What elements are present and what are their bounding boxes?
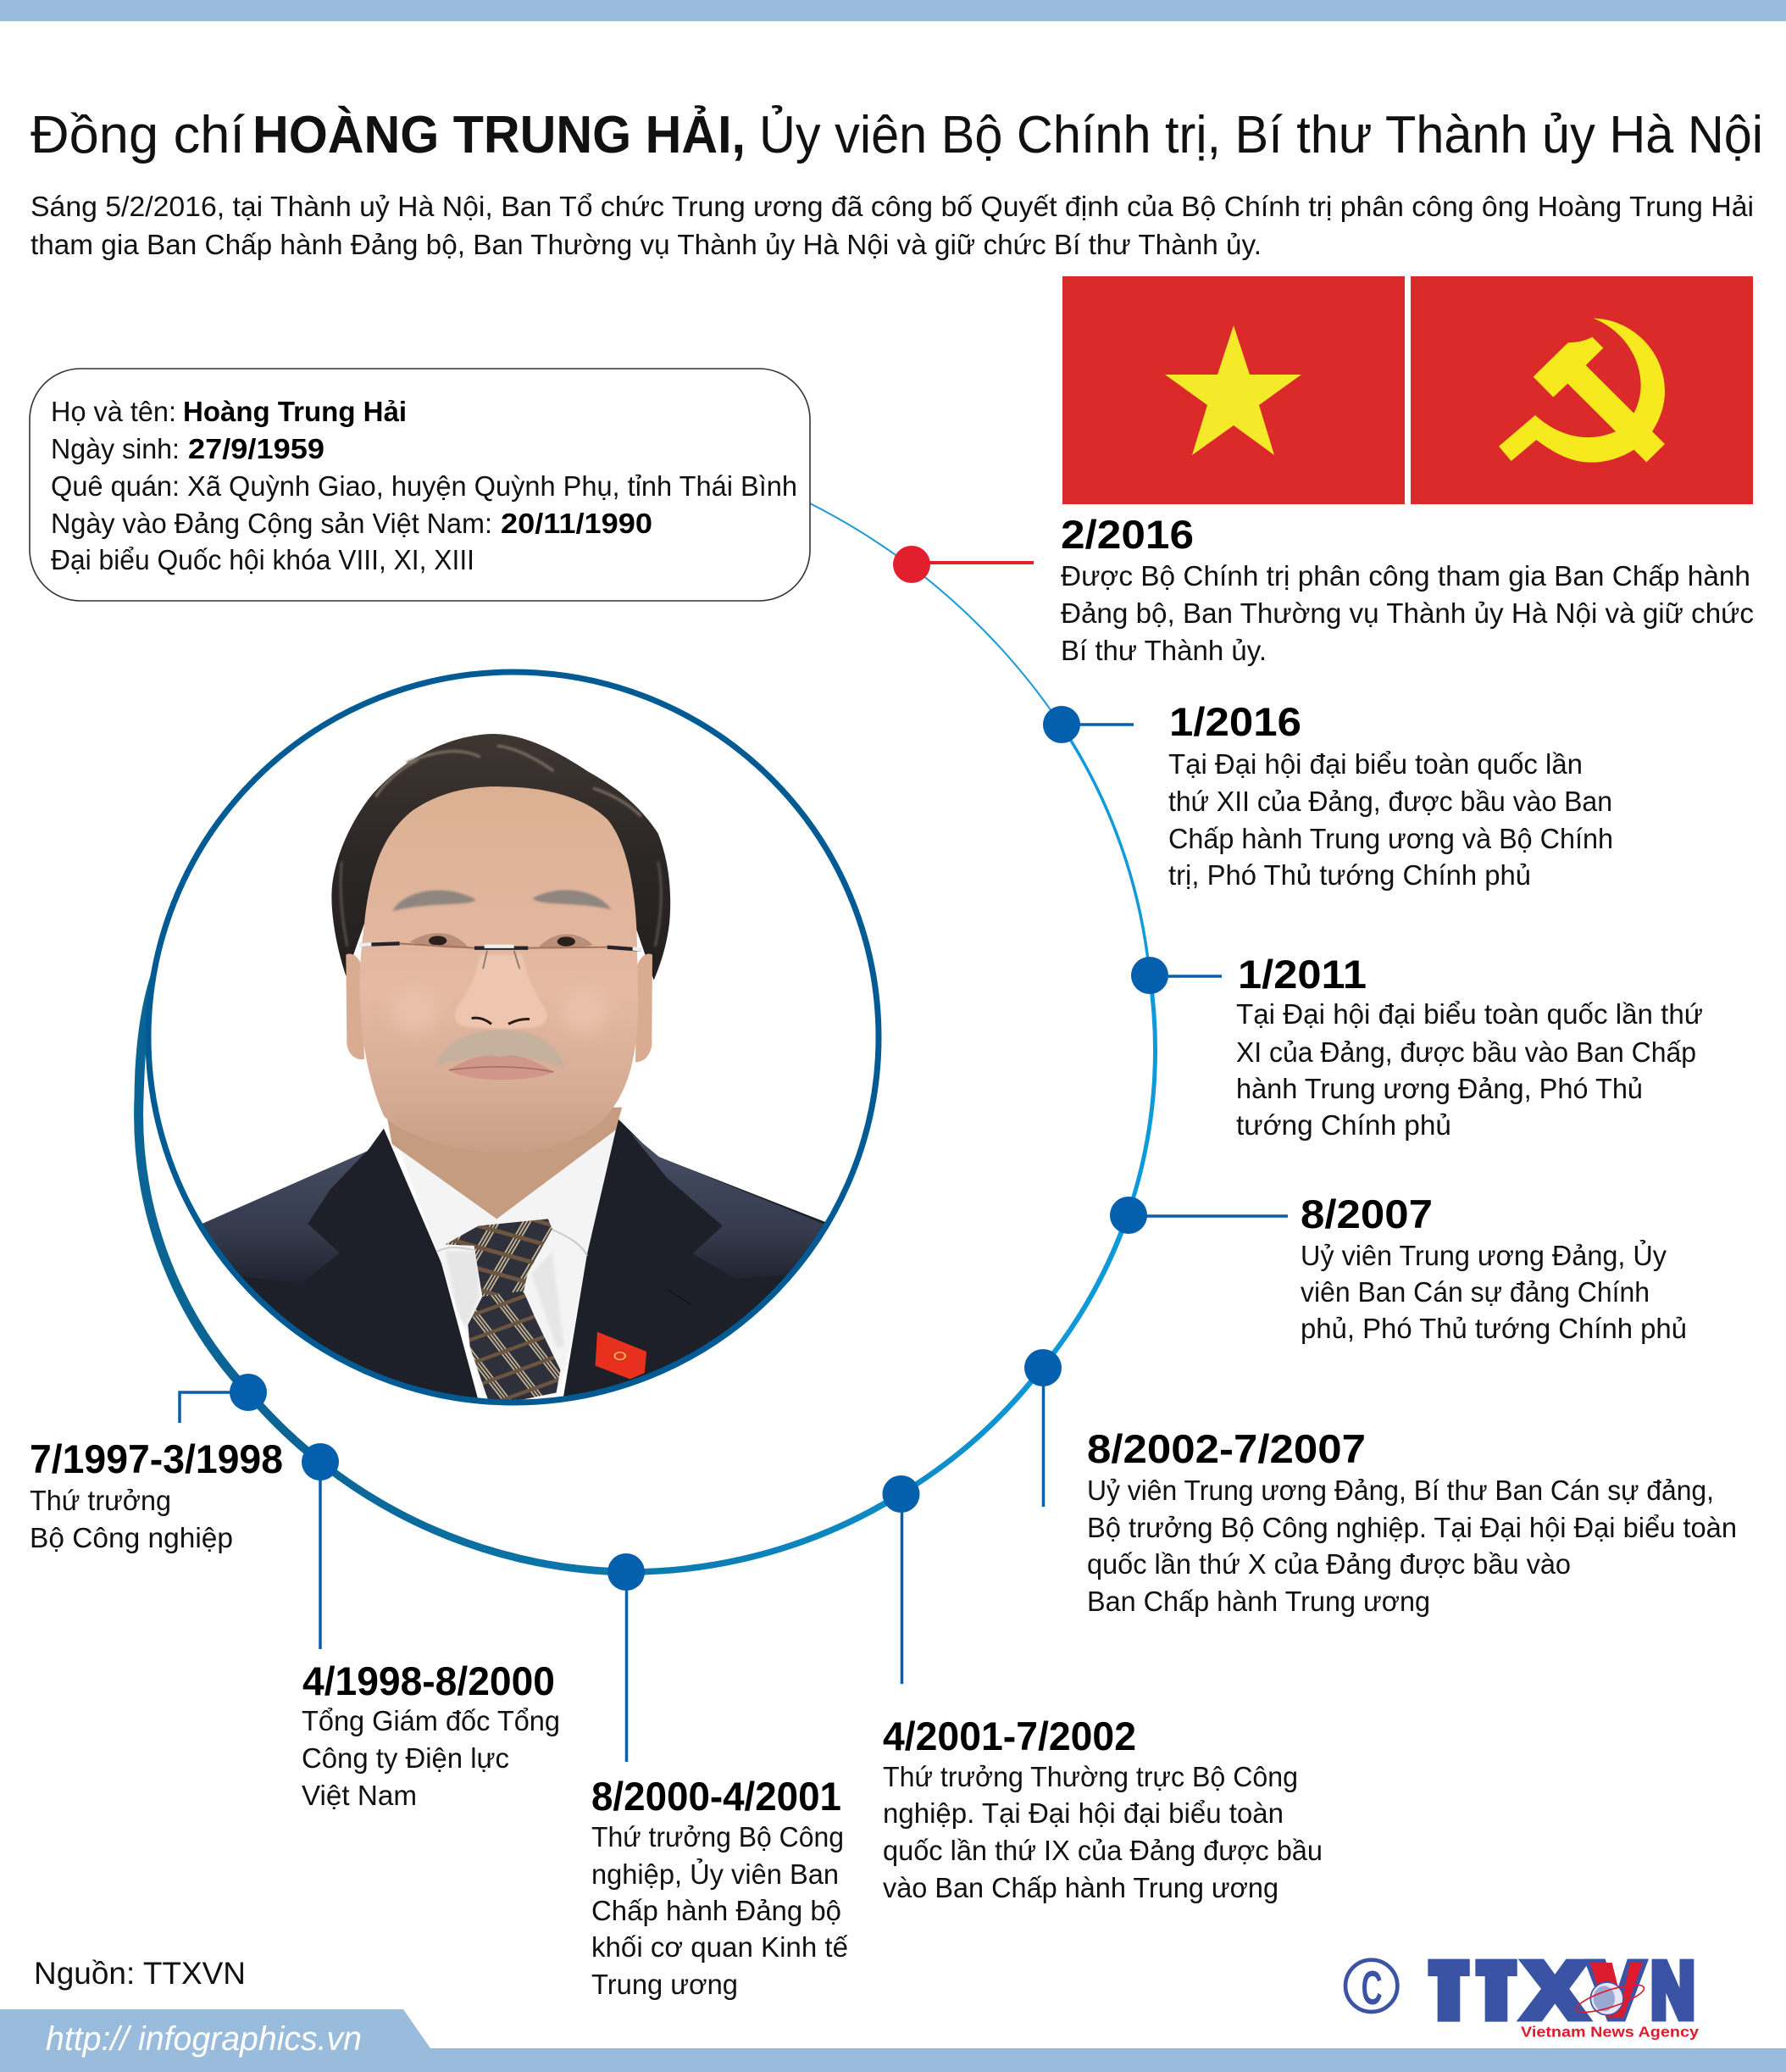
marker: 8/2000-4/2001 xyxy=(607,1553,645,1762)
marker: 8/2007 xyxy=(1110,1197,1288,1234)
milestone: 4/2001-7/2002: nghiệp. Tại Đại hội đại biểu toàn xyxy=(883,1797,1284,1829)
title xyxy=(31,106,1763,164)
milestone: 4/2001-7/2002: quốc lần thứ IX của Đảng được bầu xyxy=(883,1835,1323,1866)
bottom bar with website tab xyxy=(0,2009,1786,2072)
icon: Vietnam flag xyxy=(1062,276,1405,504)
icon: copyright symbol: C xyxy=(1362,1962,1383,2015)
milestone: 8/2002-7/2007: Bộ trưởng Bộ Công nghiệp. Tại Đại hội Đại biểu toàn xyxy=(1087,1512,1737,1543)
milestone: 2/2016 xyxy=(1061,512,1754,666)
logo: TTXVN Vietnam News Agency: Vietnam News Agency xyxy=(1521,2023,1699,2040)
logo: TTXVN Vietnam News Agency: X xyxy=(1524,1947,1585,2035)
panel: biography box: Ngày sinh: xyxy=(51,433,180,464)
top bar xyxy=(0,0,1786,21)
timeline spiral arc xyxy=(134,503,1156,1572)
panel: biography box: Hoàng Trung Hải xyxy=(183,396,407,427)
milestone: 8/2000-4/2001: nghiệp, Ủy viên Ban xyxy=(591,1858,839,1890)
marker: 1/2016 xyxy=(1043,706,1134,743)
marker: 2/2016 red dot xyxy=(893,546,1034,583)
milestone: 1/2011: tướng Chính phủ xyxy=(1236,1109,1451,1141)
icon: party flag with hammer and sickle xyxy=(1411,276,1753,504)
panel: biography box: Quê quán: Xã Quỳnh Giao, huyện Quỳnh Phụ, tỉnh Thái Bình xyxy=(51,470,797,502)
milestone: 1/2011 xyxy=(1236,952,1703,1141)
milestone: 1/2016: Chấp hành Trung ương và Bộ Chính xyxy=(1168,823,1613,854)
milestone: 4/2001-7/2002 xyxy=(883,1714,1323,1903)
milestone: 1/2011: 1/2011 xyxy=(1238,952,1367,997)
panel: biography box: 27/9/1959 xyxy=(188,433,324,464)
logo: TTXVN Vietnam News Agency: V xyxy=(1589,1947,1643,2035)
panel: biography box xyxy=(30,369,810,601)
milestone: 2/2016: Bí thư Thành ủy. xyxy=(1061,635,1267,666)
milestone: 8/2002-7/2007 xyxy=(1087,1426,1737,1617)
milestone: 8/2000-4/2001: khối cơ quan Kinh tế xyxy=(591,1931,848,1963)
milestone: 1/2016: 1/2016 xyxy=(1169,699,1301,744)
milestone: 8/2007 xyxy=(1301,1192,1687,1344)
milestone: 8/2002-7/2007: 8/2002-7/2007 xyxy=(1087,1426,1366,1471)
logo: TTXVN Vietnam News Agency xyxy=(1430,1947,1699,2040)
marker: 1/2011 xyxy=(1131,957,1222,994)
milestone: 4/1998-8/2000: Tổng Giám đốc Tổng xyxy=(302,1705,560,1736)
milestone: 8/2000-4/2001: Trung ương xyxy=(591,1969,738,2000)
logo: TTXVN Vietnam News Agency: N xyxy=(1651,1947,1694,2035)
marker: 4/2001-7/2002 xyxy=(883,1475,920,1684)
milestone: 4/2001-7/2002: Thứ trưởng Thường trực Bộ Công xyxy=(883,1761,1298,1792)
panel: biography box: Đại biểu Quốc hội khóa VIII, XI, XIII xyxy=(51,544,474,575)
milestone: 1/2011: XI của Đảng, được bầu vào Ban Chấp xyxy=(1236,1036,1696,1068)
milestone: 4/2001-7/2002: vào Ban Chấp hành Trung ương xyxy=(883,1872,1278,1903)
milestone: 4/2001-7/2002: 4/2001-7/2002 xyxy=(883,1714,1136,1758)
milestone: 8/2000-4/2001: 8/2000-4/2001 xyxy=(591,1774,841,1819)
milestone: 2/2016: 2/2016 xyxy=(1061,512,1194,557)
milestone: 1/2011: hành Trung ương Đảng, Phó Thủ xyxy=(1236,1073,1643,1104)
title: Ủy viên Bộ Chính trị, Bí thư Thành ủy Hà Nội xyxy=(759,106,1763,164)
milestone: 4/1998-8/2000: Việt Nam xyxy=(302,1780,417,1811)
logo: TTXVN Vietnam News Agency: T xyxy=(1478,1947,1515,2035)
milestone: 1/2011: Tại Đại hội đại biểu toàn quốc lần thứ xyxy=(1236,998,1703,1030)
logo: TTXVN Vietnam News Agency: T xyxy=(1430,1947,1467,2035)
milestone: 2/2016: Đảng bộ, Ban Thường vụ Thành ủy Hà Nội và giữ chức xyxy=(1061,597,1754,629)
milestone: 8/2002-7/2007: Uỷ viên Trung ương Đảng, Bí thư Ban Cán sự đảng, xyxy=(1087,1475,1714,1506)
milestone: 8/2000-4/2001: Chấp hành Đảng bộ xyxy=(591,1895,841,1926)
title: Đồng chí xyxy=(31,106,245,164)
milestone: 4/1998-8/2000: 4/1998-8/2000 xyxy=(302,1658,555,1703)
milestone: 8/2000-4/2001: Thứ trưởng Bộ Công xyxy=(591,1821,844,1853)
panel: biography box: Ngày vào Đảng Cộng sản Việt Nam: xyxy=(51,508,492,539)
panel: biography box: 20/11/1990 xyxy=(501,508,652,539)
icon: copyright symbol xyxy=(1345,1960,1397,2015)
milestone: 4/1998-8/2000 xyxy=(302,1658,560,1811)
marker: 4/1998-8/2000 xyxy=(302,1443,339,1649)
milestone: 8/2000-4/2001 xyxy=(591,1774,848,2000)
milestone: 1/2016: Tại Đại hội đại biểu toàn quốc lần xyxy=(1168,748,1583,780)
bottom bar with website tab: http:// infographics.vn xyxy=(46,2020,362,2058)
intro text xyxy=(31,191,1754,260)
portrait: head xyxy=(331,734,670,1154)
milestone: 8/2007: 8/2007 xyxy=(1301,1192,1433,1236)
milestone: 7/1997-3/1998 xyxy=(30,1436,283,1553)
milestone: 8/2007: Uỷ viên Trung ương Đảng, Ủy xyxy=(1301,1240,1667,1271)
milestone: 4/1998-8/2000: Công ty Điện lực xyxy=(302,1742,509,1774)
milestone: 8/2007: viên Ban Cán sự đảng Chính xyxy=(1301,1276,1650,1308)
milestone: 8/2002-7/2007: Ban Chấp hành Trung ương xyxy=(1087,1586,1430,1617)
milestone: 8/2007: phủ, Phó Thủ tướng Chính phủ xyxy=(1301,1313,1687,1344)
marker: 7/1997-3/1998 xyxy=(180,1374,267,1423)
marker: 8/2002-7/2007 xyxy=(1024,1349,1062,1507)
title: HOÀNG TRUNG HẢI, xyxy=(252,106,746,164)
portrait: suit, shirt and tie xyxy=(191,1108,835,1415)
milestone: 2/2016: Được Bộ Chính trị phân công tham gia Ban Chấp hành xyxy=(1061,560,1750,592)
milestone: 1/2016 xyxy=(1168,699,1613,891)
intro text: Sáng 5/2/2016, tại Thành uỷ Hà Nội, Ban Tổ chức Trung ương đã công bố Quyết định của Bộ Chính trị phân công ông Hoàng Trung Hải xyxy=(31,191,1754,222)
milestone: 1/2016: trị, Phó Thủ tướng Chính phủ xyxy=(1168,859,1531,891)
milestone: 7/1997-3/1998: Bộ Công nghiệp xyxy=(30,1522,233,1553)
panel: biography box: Họ và tên: xyxy=(51,396,176,427)
milestone: 1/2016: thứ XII của Đảng, được bầu vào Ban xyxy=(1168,786,1612,817)
milestone: 8/2002-7/2007: quốc lần thứ X của Đảng được bầu vào xyxy=(1087,1548,1571,1580)
milestone: 7/1997-3/1998: 7/1997-3/1998 xyxy=(30,1436,283,1481)
milestone: 7/1997-3/1998: Thứ trưởng xyxy=(30,1485,171,1516)
portrait xyxy=(148,672,879,1415)
intro text: tham gia Ban Chấp hành Đảng bộ, Ban Thường vụ Thành ủy Hà Nội và giữ chức Bí thư Thành ủy. xyxy=(31,229,1262,260)
source note: Nguồn: TTXVN xyxy=(34,1956,246,1991)
